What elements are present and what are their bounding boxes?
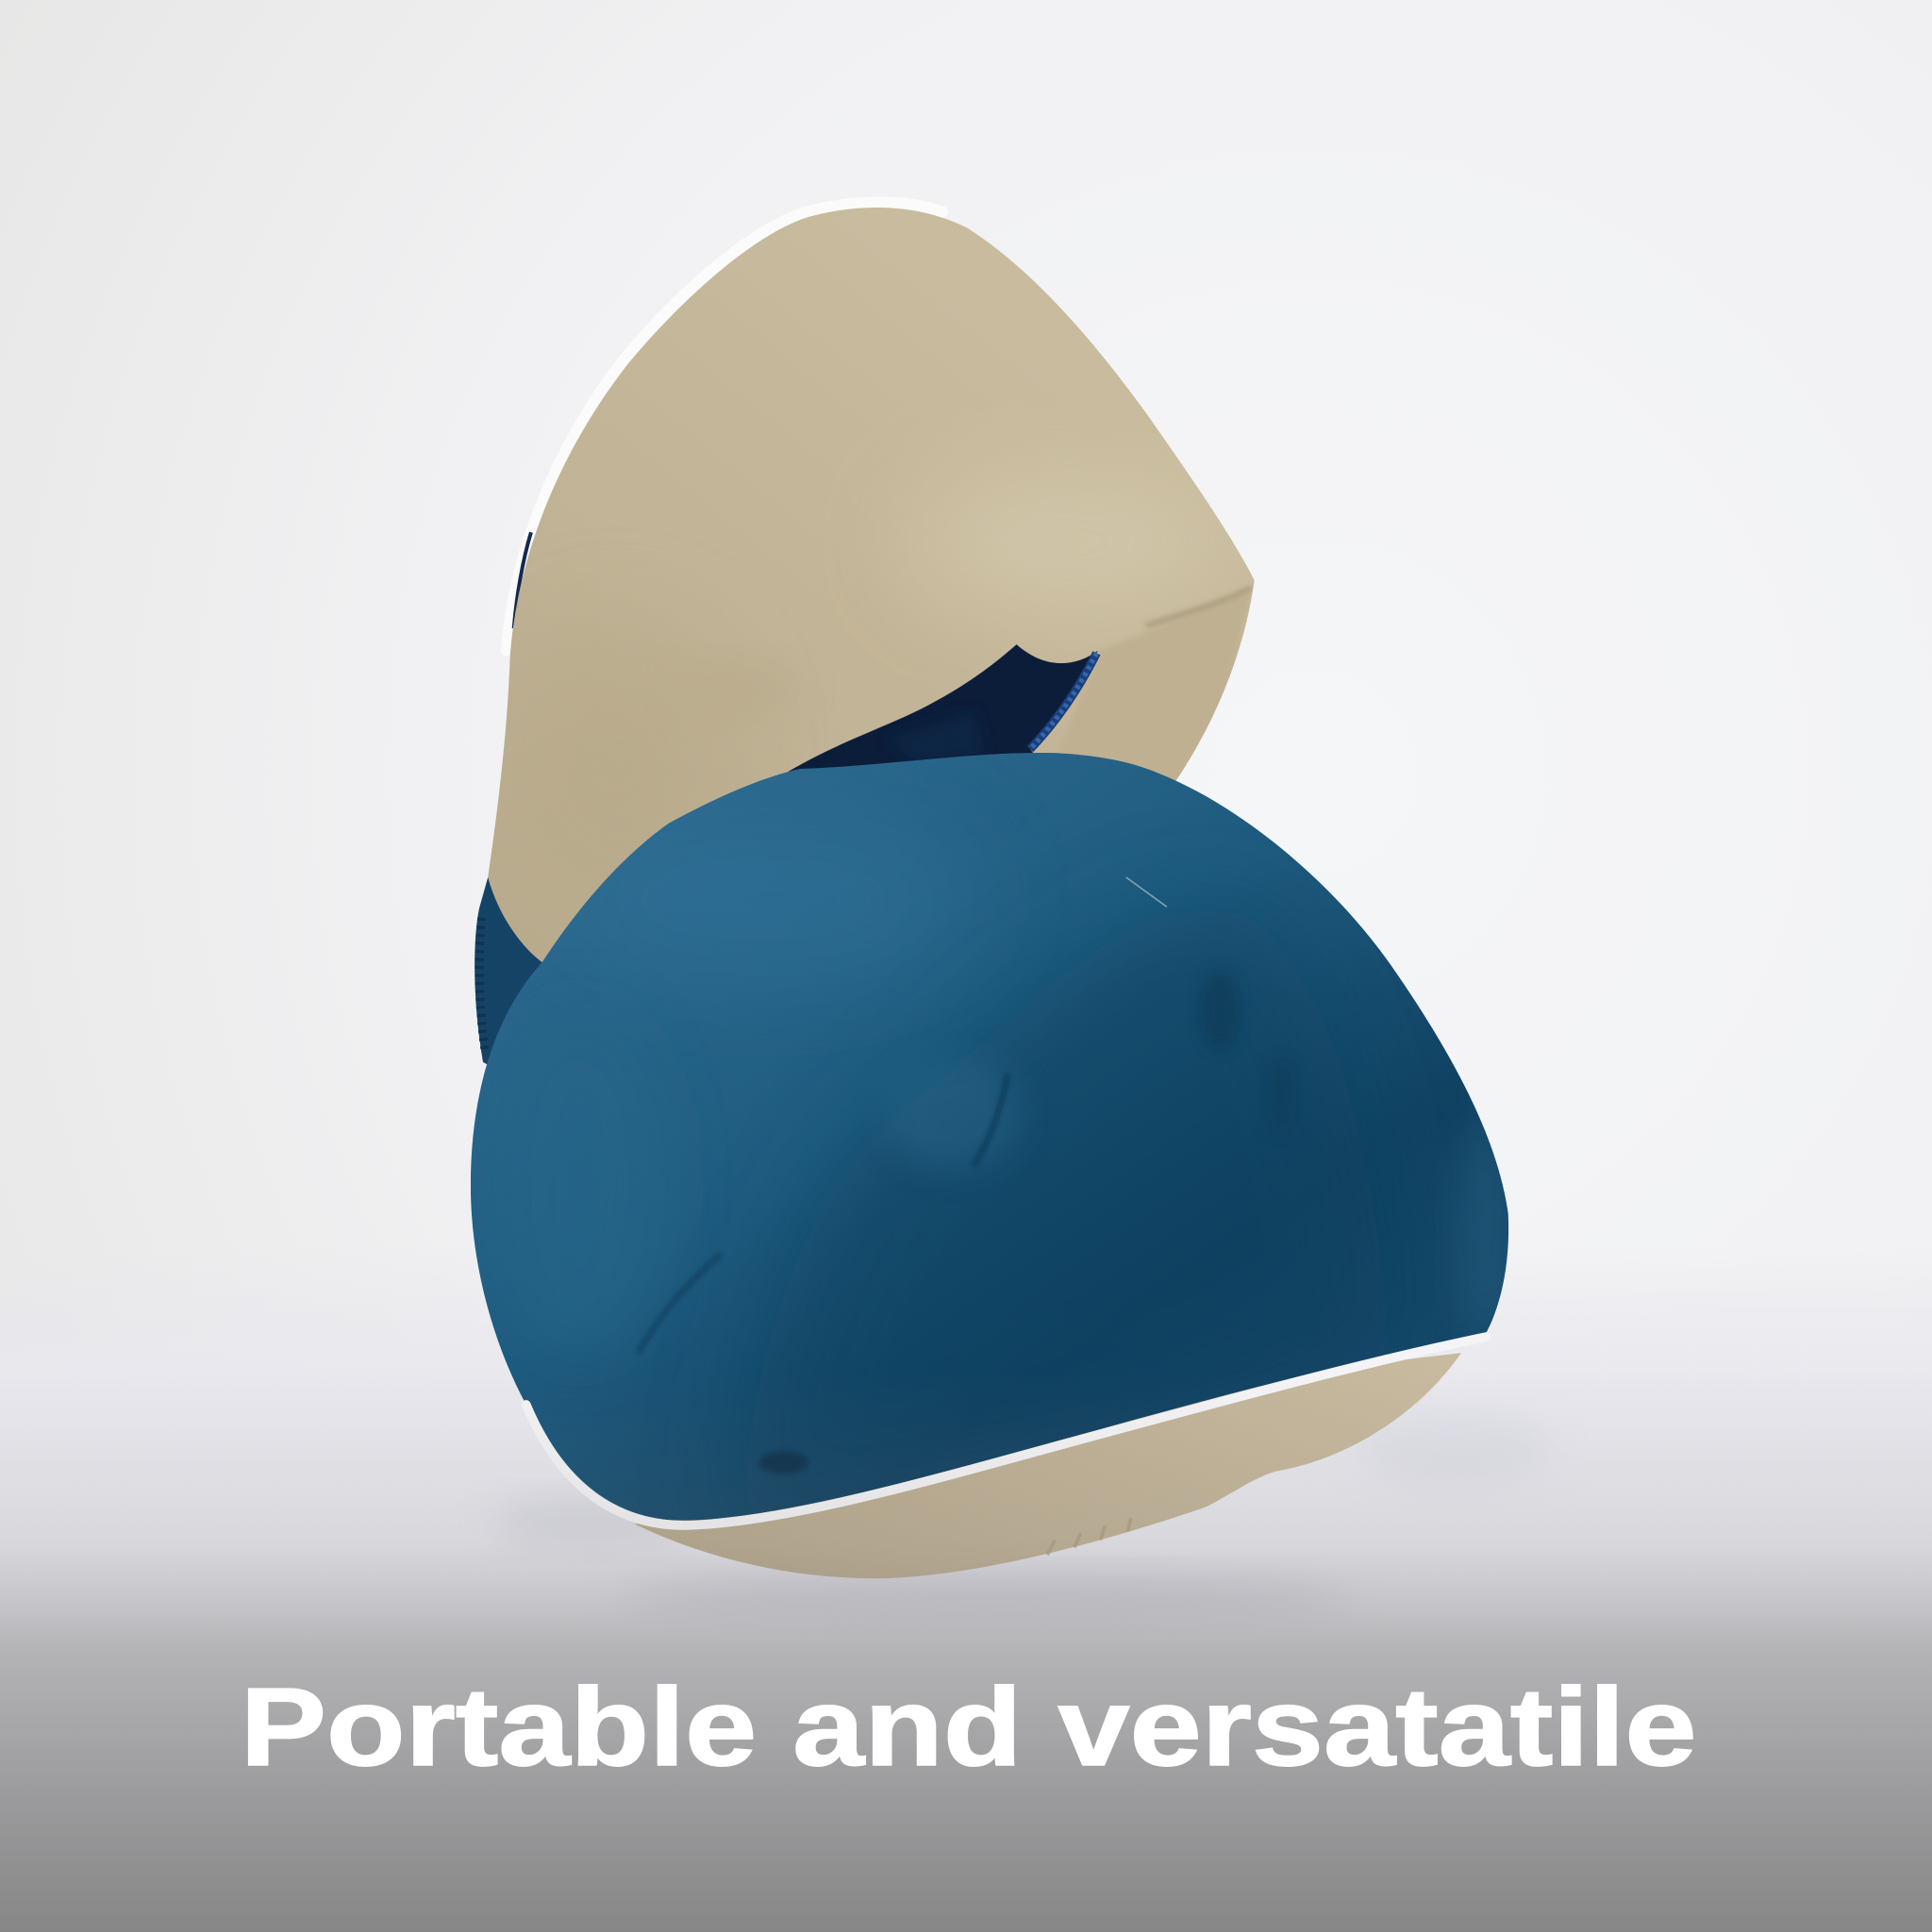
blue main body [456,740,1528,1528]
lower beige underside [635,1353,1461,1578]
fold crease [1146,588,1252,626]
navy edge behind piping [514,532,531,628]
right lobe shaded face [1087,596,1252,781]
ribbed side panel [475,877,579,1084]
beige upper lobe [488,208,1255,962]
white piping on top edge [507,202,942,651]
inner blue panel glint [887,712,986,764]
white piping on blue base [526,1337,1486,1525]
bottom dark gradient overlay [0,1232,1932,1932]
pillow [456,185,1528,1578]
dark inner opening [776,635,1103,789]
fabric surface [0,1244,1932,1932]
seam wrinkles on underside [1047,1518,1131,1555]
caption: Portable and versatatile [241,1665,1697,1789]
zipper tape [1030,653,1096,749]
